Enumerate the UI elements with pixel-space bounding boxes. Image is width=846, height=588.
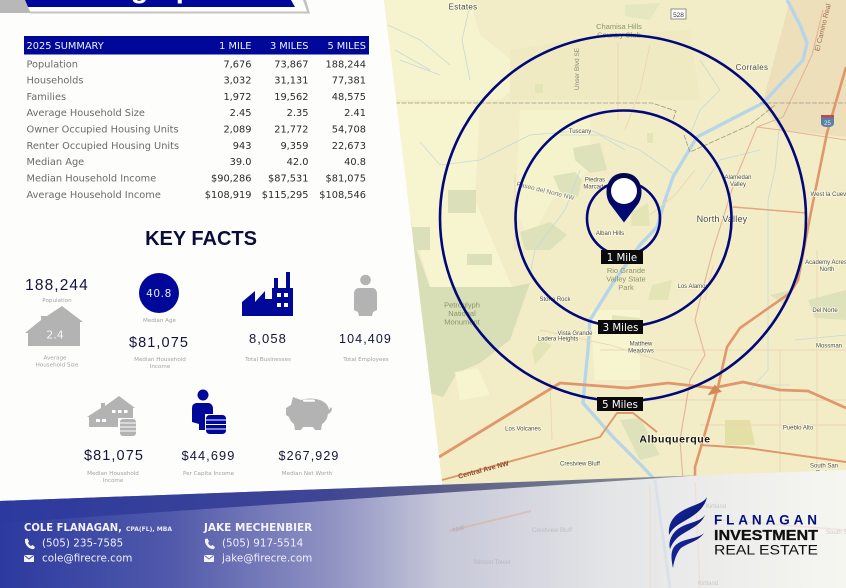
streams xyxy=(388,5,846,390)
park: Petroglyph National Monument xyxy=(413,240,530,397)
contact: Jake Mechenbier: (505) 917-5514 xyxy=(222,538,304,550)
interstates xyxy=(439,382,846,457)
row: Population: 7,676 xyxy=(223,60,252,70)
stat: median household income: Income xyxy=(150,364,171,370)
map labels: South San xyxy=(810,464,838,470)
row: Average Household Size: 2.41 xyxy=(344,108,366,119)
stat: total employees xyxy=(339,275,392,363)
row: Renter Occupied Housing Units: 9,359 xyxy=(280,141,308,152)
stat: per capita income: $44,699 xyxy=(182,448,235,463)
ring label: 1 Mile: 1 Mile xyxy=(607,253,637,264)
icon: envelope xyxy=(204,555,214,562)
highway shield: 528: 528 xyxy=(673,12,684,19)
table header xyxy=(24,36,369,54)
map labels: Rio Grande xyxy=(607,266,645,275)
stat: total businesses xyxy=(242,272,293,363)
key facts heading: KEY FACTS xyxy=(145,228,257,250)
row: Households: Households xyxy=(26,76,83,86)
row: Households: 3,032 xyxy=(223,76,252,86)
map labels: Pueblo Alto xyxy=(783,426,814,432)
row: Families: Families xyxy=(26,92,66,103)
map labels: Los Alamos xyxy=(677,284,709,290)
map labels: Los Volcanes xyxy=(505,426,541,432)
map labels: Corrales xyxy=(736,63,768,72)
icon: phone xyxy=(205,538,215,549)
row: Households: 31,131 xyxy=(274,76,308,86)
stat: average household size xyxy=(25,306,83,368)
map labels: Mossman xyxy=(816,344,842,350)
stat: median household income row two: Income xyxy=(103,478,124,484)
logo: INVESTMENT xyxy=(714,527,818,544)
icon: phone xyxy=(25,538,35,549)
row: Families: 19,562 xyxy=(274,92,308,103)
row: Median Household Income: $81,075 xyxy=(325,174,366,184)
faint map in footer: Crestview Bluff xyxy=(532,528,572,534)
row: Median Age: Median Age xyxy=(26,157,84,168)
stat: total businesses: 8,058 xyxy=(249,331,287,346)
stat: total employees: 104,409 xyxy=(339,332,392,346)
map labels: Stinson Tower xyxy=(513,487,551,493)
ring label: 5 Miles: 5 Miles xyxy=(602,400,638,411)
river: Rio Grande xyxy=(583,0,807,480)
map labels: Petroglyph xyxy=(444,300,480,310)
row: Families: 1,972 xyxy=(223,92,252,103)
map labels: Valley State xyxy=(606,274,646,284)
stat: median household income: $81,075 xyxy=(129,335,189,351)
map labels: North xyxy=(820,267,834,273)
minor roads xyxy=(515,42,846,480)
map pin xyxy=(607,173,641,222)
map labels: National xyxy=(448,309,476,318)
faint map in footer: Kirtland xyxy=(706,504,726,510)
map background xyxy=(380,0,846,500)
stat: population: 188,244 xyxy=(25,277,89,294)
stat: median household income row two: $81,075 xyxy=(84,448,144,464)
county line xyxy=(395,103,846,152)
ring label: 5 Miles xyxy=(597,397,643,411)
summary table xyxy=(24,36,369,201)
icon: envelope xyxy=(24,555,34,562)
row: Renter Occupied Housing Units xyxy=(26,141,366,152)
row: Owner Occupied Housing Units: Owner Occupied Housing Units xyxy=(26,124,179,136)
stat: median age: Median Age xyxy=(143,318,177,324)
row: Average Household Income: $108,546 xyxy=(319,190,366,201)
highway shield: I-25 xyxy=(821,115,834,127)
stat: median net worth: $267,929 xyxy=(279,449,339,463)
map labels: Tuscany xyxy=(569,129,591,135)
map labels: Alamedan xyxy=(724,175,752,181)
faint map in footer xyxy=(449,480,846,588)
row: Renter Occupied Housing Units: Renter Occupied Housing Units xyxy=(26,141,179,152)
row: Median Household Income xyxy=(26,174,366,184)
row: Renter Occupied Housing Units: 22,673 xyxy=(332,141,366,152)
highway shield: 528 xyxy=(671,9,686,19)
contact: Cole Flanagan: (505) 235-7585 xyxy=(42,538,123,550)
map labels: Matthew xyxy=(630,342,653,348)
row: Average Household Size xyxy=(26,108,366,119)
row: Population xyxy=(26,60,366,70)
logo: REAL ESTATE xyxy=(714,542,818,558)
map labels: Valley xyxy=(730,182,746,188)
radius rings xyxy=(440,35,806,401)
stat: median net worth: Median Net Worth xyxy=(282,471,333,477)
map labels: Ladera Heights xyxy=(538,336,578,342)
contact: Jake Mechenbier: jake@firecre.com xyxy=(221,552,312,564)
row: Households xyxy=(26,76,366,86)
row: Owner Occupied Housing Units: 2,089 xyxy=(223,124,252,136)
map labels: Pedro xyxy=(816,470,833,476)
left white panel xyxy=(0,0,442,510)
map labels: Albuquerque xyxy=(639,434,711,446)
row: Renter Occupied Housing Units: 943 xyxy=(233,141,252,152)
highway shield: I-25: 25 xyxy=(824,121,831,127)
map labels: Estates xyxy=(449,2,477,12)
faint map in footer: Stinson Tower xyxy=(473,560,511,566)
map labels: Piedras xyxy=(585,178,605,184)
stat: median household income row two: Median Household xyxy=(87,471,139,477)
map labels: North Valley xyxy=(697,214,748,224)
map labels: Paseo del Norte NW xyxy=(516,181,576,202)
row: Population: 188,244 xyxy=(325,60,366,70)
stat: total businesses: Total Businesses xyxy=(244,357,291,363)
stat: per capita income: Per Capita Income xyxy=(183,471,235,477)
stat: average household size: 2.4 xyxy=(46,328,64,342)
row: Average Household Size: 2.35 xyxy=(287,108,308,119)
map labels: Academy Acres xyxy=(805,260,846,266)
map labels: Unser Blvd SE xyxy=(574,47,581,90)
row: Median Household Income: Median Household Income xyxy=(26,174,156,184)
map labels: Meadows xyxy=(628,348,654,354)
row: Median Age: 42.0 xyxy=(287,157,308,168)
icon: factory xyxy=(242,272,293,316)
row: Average Household Income: $115,295 xyxy=(262,190,308,201)
faint map in footer: NW xyxy=(452,525,466,534)
stat: median net worth xyxy=(279,397,339,477)
map labels: El Camino Real xyxy=(814,3,833,52)
table header: 5 MILES xyxy=(327,41,366,52)
icon: person and coins xyxy=(192,390,227,435)
stat: average household size: Household Size xyxy=(36,362,79,368)
logo xyxy=(669,497,818,568)
row: Median Household Income: $90,286 xyxy=(211,174,252,184)
icon: houses and coins xyxy=(87,396,137,437)
table header: 2025 SUMMARY xyxy=(26,41,104,52)
row: Average Household Income: Average Household Income xyxy=(26,190,161,201)
title ribbon xyxy=(0,0,310,14)
contact: Cole Flanagan: COLE FLANAGAN, xyxy=(24,522,122,534)
table header: 1 MILE xyxy=(219,41,252,52)
row: Median Age xyxy=(26,157,366,168)
map labels: Chamisa Hills xyxy=(596,22,642,31)
stat: population: Population xyxy=(42,298,72,304)
logo: FLANAGAN xyxy=(714,512,817,528)
row: Population: 73,867 xyxy=(274,60,308,70)
row: Owner Occupied Housing Units xyxy=(26,124,366,136)
row: Families xyxy=(26,92,366,103)
stat: per capita income xyxy=(182,390,235,477)
row: Average Household Size: Average Household Size xyxy=(26,108,145,119)
row: Households: 77,381 xyxy=(332,76,366,86)
row: Median Age: 40.8 xyxy=(344,157,366,168)
map labels: Park xyxy=(618,283,634,292)
icon: piggy bank xyxy=(286,397,332,430)
map labels: Alban Hills xyxy=(596,231,624,237)
map labels: Stone Rock xyxy=(539,297,572,303)
row: Average Household Income xyxy=(26,190,366,201)
map labels: Crestview Bluff xyxy=(560,462,600,468)
contact: Cole Flanagan: CPA(FL), MBA xyxy=(126,527,173,533)
contact: Jake Mechenbier: JAKE MECHENBIER xyxy=(203,522,312,534)
stat: total employees: Total Employees xyxy=(342,357,389,363)
map labels: Vista Grande xyxy=(558,331,593,337)
row: Median Household Income: $87,531 xyxy=(268,174,308,184)
contact: Cole Flanagan xyxy=(24,522,173,564)
faint map in footer: Kirtland xyxy=(698,581,718,587)
stat: median age xyxy=(139,273,179,324)
table header: 3 MILES xyxy=(270,41,308,52)
map labels xyxy=(444,2,846,493)
ring label: 3 Miles xyxy=(598,320,643,334)
row: Families: 48,575 xyxy=(332,92,366,103)
row: Median Age: 39.0 xyxy=(230,157,252,168)
map labels: Country Club xyxy=(597,30,641,40)
stat: average household size: Average xyxy=(44,356,67,362)
contact: Cole Flanagan: cole@firecre.com xyxy=(42,552,132,564)
row: Population: Population xyxy=(26,60,78,70)
stat: median household income: Median Household xyxy=(134,357,186,363)
map labels: Del Norte xyxy=(812,308,838,314)
map labels: Marcada xyxy=(583,184,607,190)
icon: person xyxy=(354,275,377,316)
ring label: 3 Miles: 3 Miles xyxy=(603,323,638,334)
map labels: Monument xyxy=(444,318,481,326)
footer band xyxy=(0,470,846,588)
row: Owner Occupied Housing Units: 54,708 xyxy=(332,124,366,136)
map labels: Central Ave NW xyxy=(458,460,510,481)
logo swoosh xyxy=(669,497,707,568)
row: Average Household Size: 2.45 xyxy=(230,108,252,119)
stat: median household income row two xyxy=(84,396,144,484)
contact: Jake Mechenbier xyxy=(203,522,312,564)
ring label: 1 Mile xyxy=(601,250,643,264)
row: Average Household Income: $108,919 xyxy=(205,190,252,201)
stat: population xyxy=(25,277,89,304)
stat: median age: 40.8 xyxy=(146,288,172,300)
row: Owner Occupied Housing Units: 21,772 xyxy=(274,124,308,136)
stat: median household income xyxy=(129,335,189,370)
